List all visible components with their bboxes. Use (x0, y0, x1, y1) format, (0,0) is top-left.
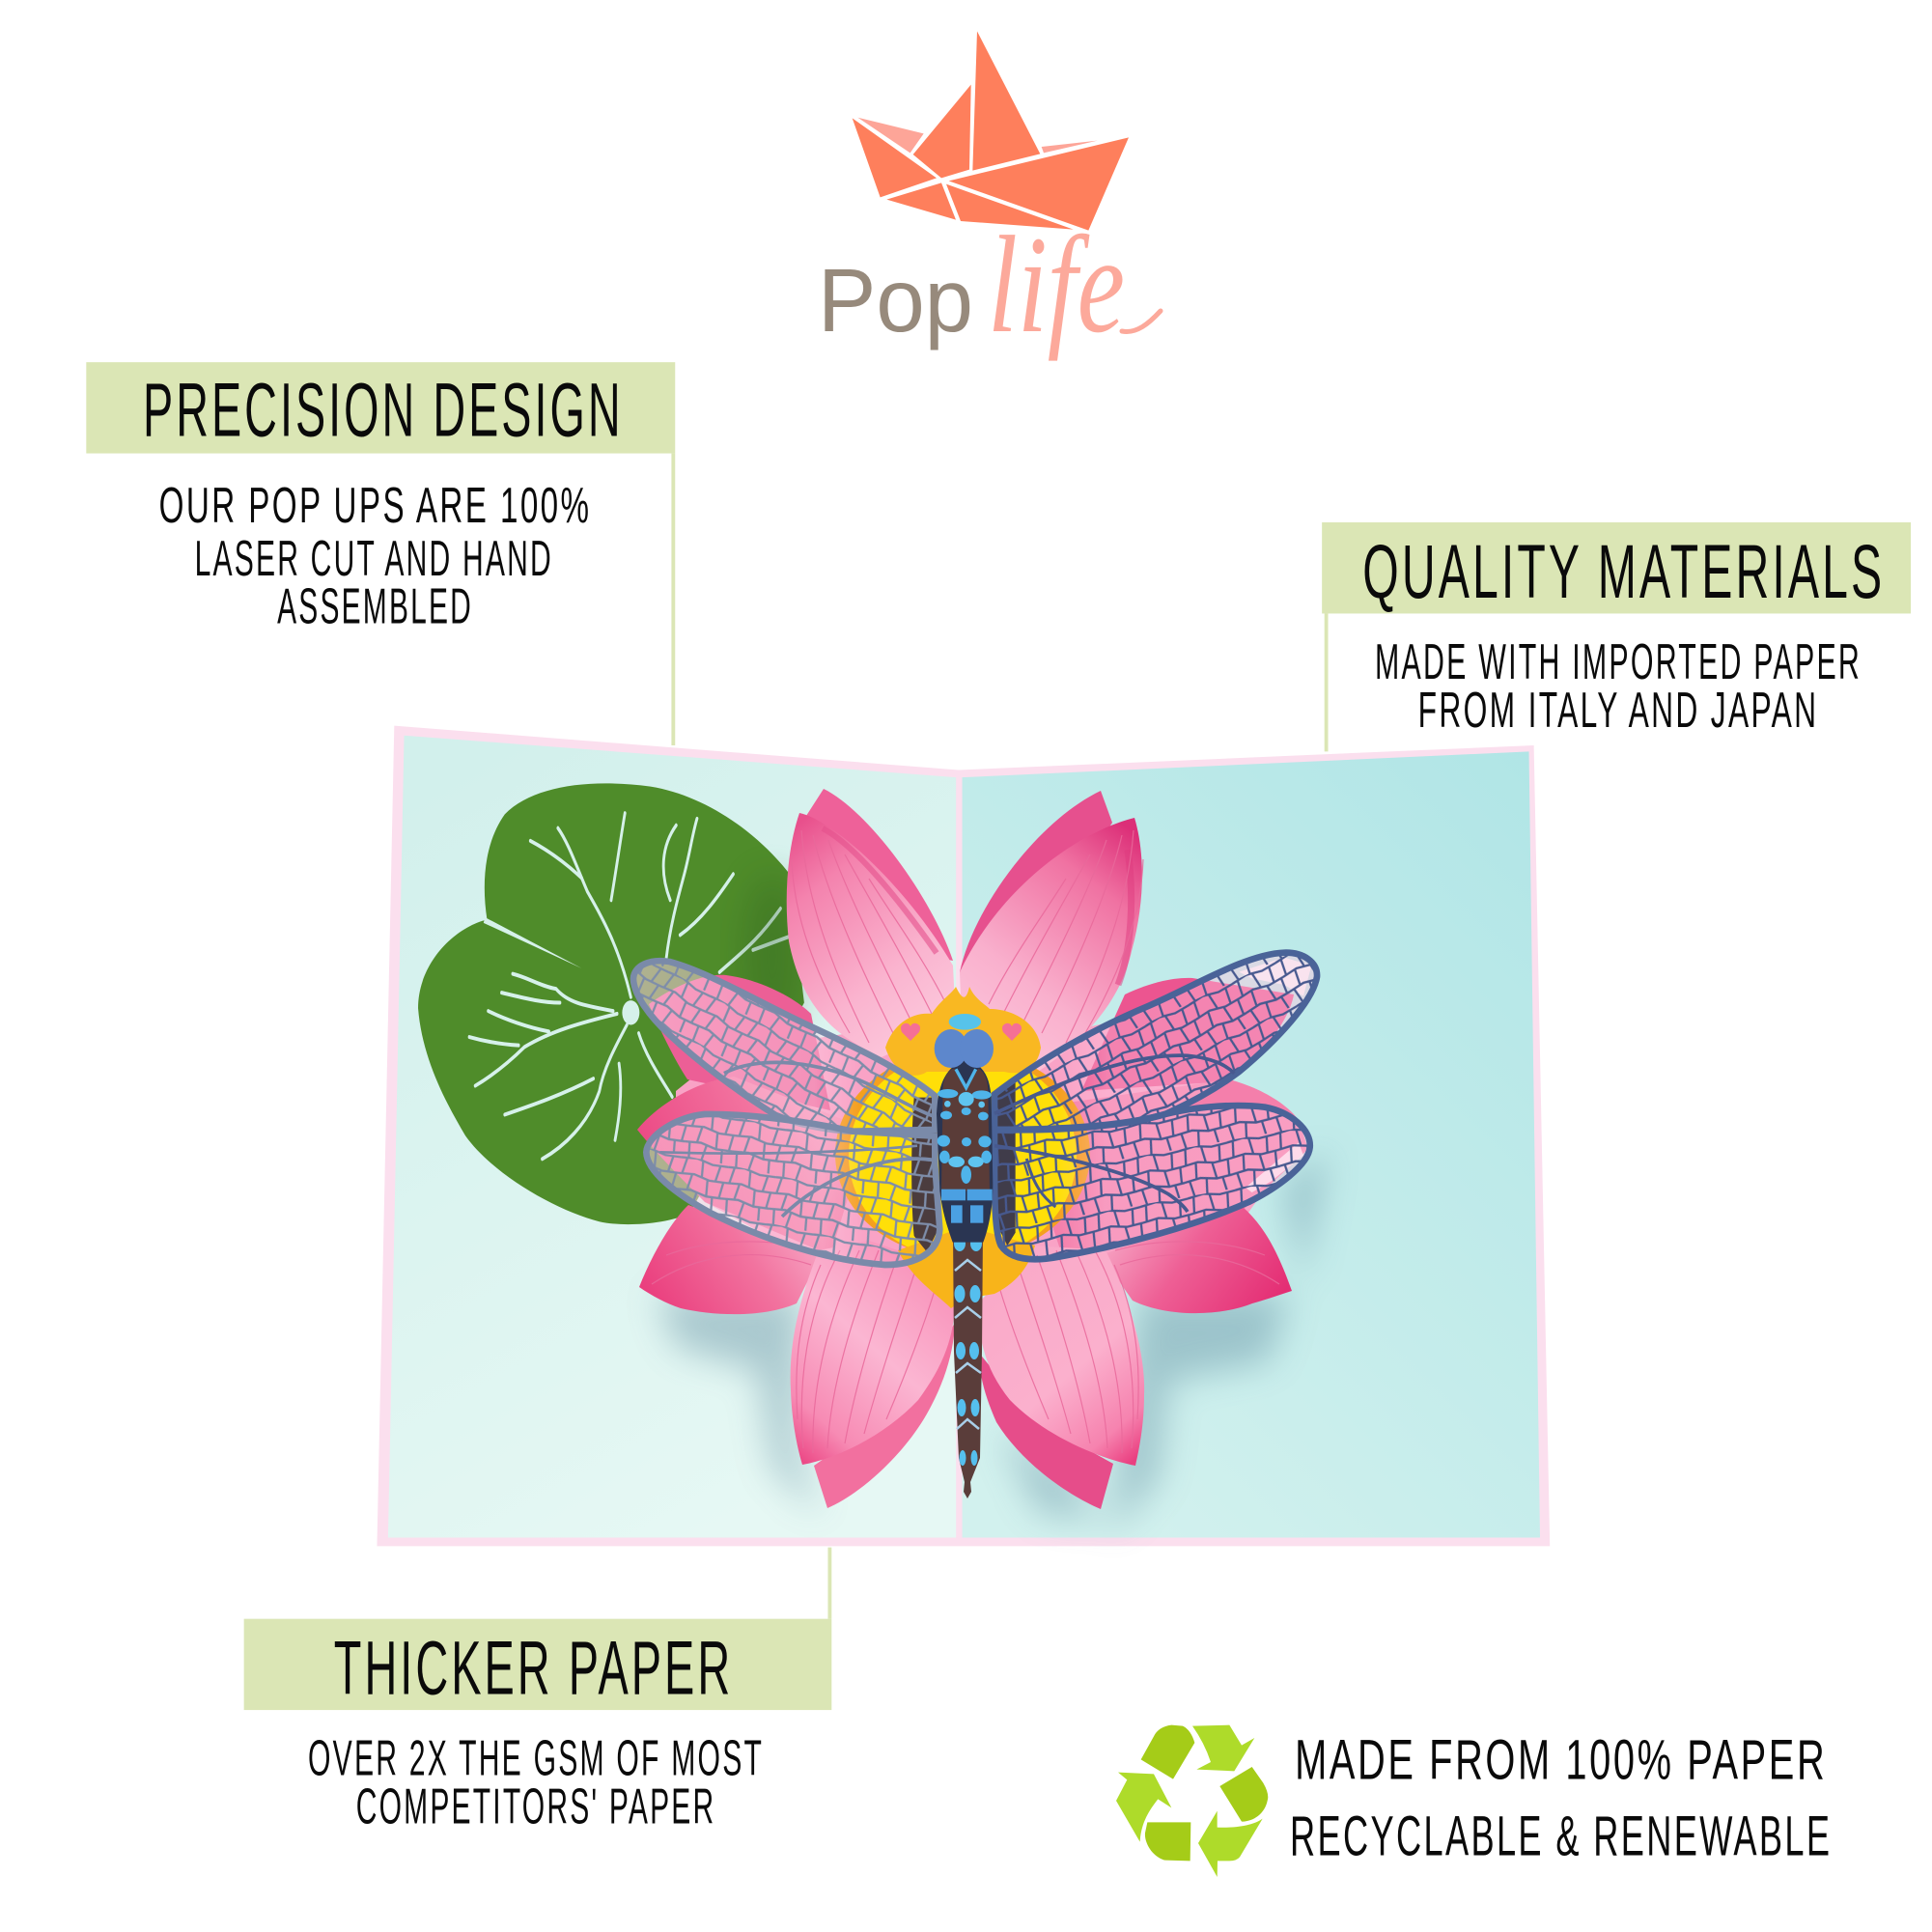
abdomen tail (953, 1231, 983, 1498)
main upper petals (787, 813, 1142, 1072)
petal underlay behind wings (676, 1004, 1294, 1265)
text: quality materials body (1375, 634, 1862, 739)
lily pad (418, 783, 804, 1224)
text: precision design body: ASSEMBLED (277, 579, 473, 635)
callout: thicker paper (244, 1548, 831, 1834)
petal veins (652, 830, 1279, 1453)
icon: origami paper boat (853, 31, 1129, 231)
flower cast shadows (657, 1149, 1328, 1535)
heading: thicker paper: THICKER PAPER (334, 1624, 733, 1710)
icon: recycling arrows (1116, 1725, 1268, 1877)
main lower petals (791, 1241, 1144, 1466)
wing: lower right (994, 1106, 1310, 1259)
callout: quality materials (1322, 522, 1911, 751)
dragonfly (633, 953, 1317, 1498)
heading: precision design: PRECISION DESIGN (143, 367, 624, 453)
logo word: life: life (988, 209, 1125, 362)
lotus flower (637, 789, 1308, 1509)
wing tips pale cells (1239, 958, 1311, 1192)
side petals (637, 975, 1308, 1314)
back petals (806, 789, 1113, 1509)
thorax (937, 1059, 993, 1243)
lily pad shadow from flower (743, 874, 801, 1038)
logo: Poplife (818, 31, 1161, 362)
card pink base (377, 726, 1550, 1546)
text: thicker paper body: COMPETITORS' PAPER (356, 1778, 715, 1834)
text: precision design body (159, 478, 591, 635)
panel: left card page (388, 736, 956, 1537)
thorax and head (935, 1014, 994, 1243)
logo flourish (1122, 311, 1161, 331)
logo word: Pop: Pop (818, 250, 973, 350)
wing: upper left (633, 961, 935, 1132)
text: thicker paper body (308, 1731, 764, 1834)
wing: lower left (646, 1114, 939, 1265)
wing: upper right (994, 953, 1317, 1130)
text: recycling message (1290, 1729, 1832, 1868)
left wings (633, 961, 939, 1265)
left wing root mesh (911, 1098, 938, 1252)
head and eyes (935, 1014, 994, 1068)
panel: right card page (963, 751, 1540, 1537)
right wing root mesh (994, 1081, 1016, 1246)
callout: precision design (86, 362, 675, 745)
right wings (994, 953, 1317, 1259)
text: precision design body: LASER CUT AND HAND (195, 531, 553, 587)
text: precision design body: OUR POP UPS ARE 100% (159, 478, 591, 534)
flower centre (835, 987, 1090, 1308)
text: thicker paper body: OVER 2X THE GSM OF MOST (308, 1731, 764, 1787)
